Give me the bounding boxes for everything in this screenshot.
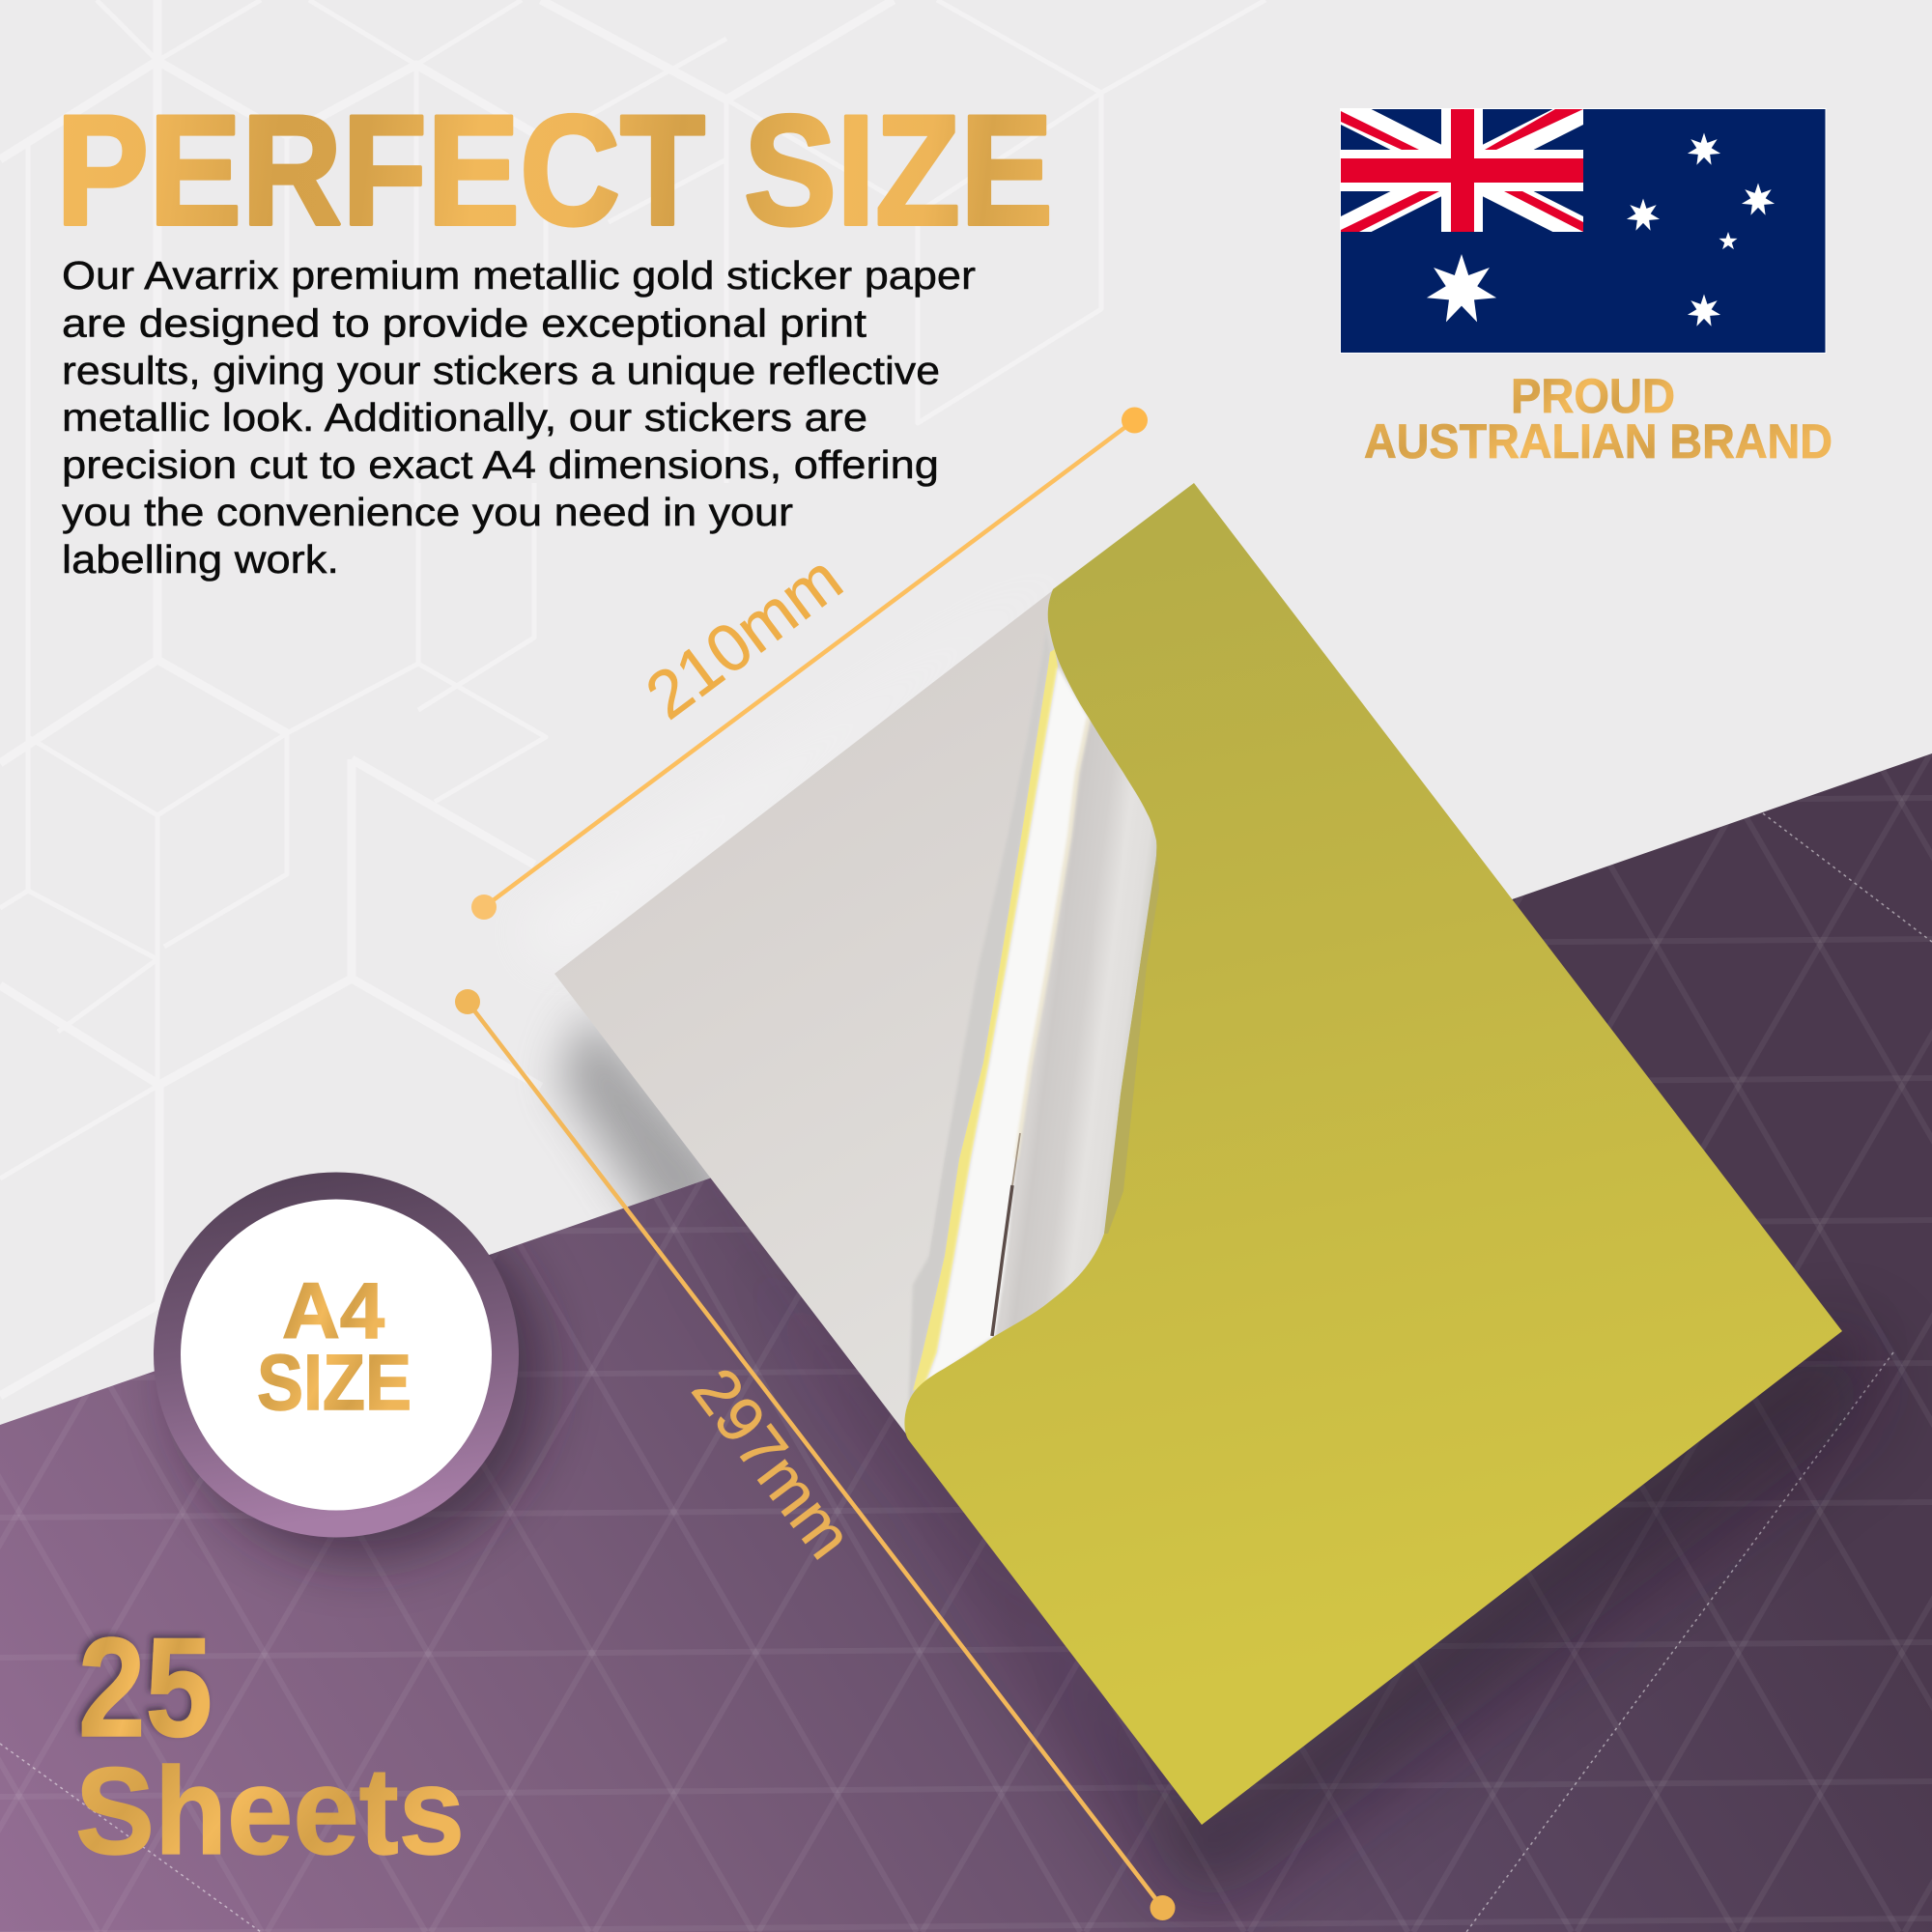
proud australian brand label: PROUD [1511,369,1675,423]
a4 size badge: SIZE [257,1339,412,1427]
body text: results, giving your stickers a unique reflective [62,348,940,392]
hexagon pattern: purple area [0,753,1932,1932]
dimension line: 210mm: 210mm [633,541,855,733]
sheet shadow [522,541,1884,1922]
pale yellow reflection [913,649,1058,1391]
hexagon pattern: light area [0,0,1265,1396]
australian flag [1340,108,1826,354]
union jack canton [1341,109,1583,232]
body text: are designed to provide exceptional print [62,301,867,346]
metallic curl [908,618,1169,1420]
dimension line: 210mm [471,408,1148,920]
title: PERFECT SIZE [56,83,1053,258]
cream edge [1016,718,1089,1159]
body text: precision cut to exact A4 dimensions, offering [62,442,939,487]
peeled sticker sheet [554,483,1842,1825]
sheet count: 25 [78,1608,213,1766]
white highlight [925,667,1089,1383]
body text: labelling work. [62,537,339,582]
purple band [0,753,1932,1932]
dimension line: 297mm [455,989,1175,1920]
a4 size badge [154,1173,519,1538]
backing paper: grey side [554,590,1053,1449]
stars [1427,133,1775,327]
body text [62,253,976,582]
gold sheet face [904,483,1842,1825]
proud australian brand label: AUSTRALIAN BRAND [1364,414,1833,469]
proud australian brand label [1364,369,1833,469]
curl reflection line [992,1185,1012,1336]
body text: Our Avarrix premium metallic gold sticker paper [62,253,976,298]
sheet count: Sheets [75,1743,465,1881]
grey fold band [908,628,1050,1420]
body text: you the convenience you need in your [62,490,793,534]
silver base [908,618,1169,1420]
olive fold strip [1104,840,1159,1234]
circle shadow [179,1193,546,1560]
dimension line: 297mm: 297mm [678,1355,867,1572]
a4 size badge: A4 [282,1267,384,1355]
sheet count [75,1608,465,1881]
body text: metallic look. Additionally, our stickers are [62,395,867,440]
